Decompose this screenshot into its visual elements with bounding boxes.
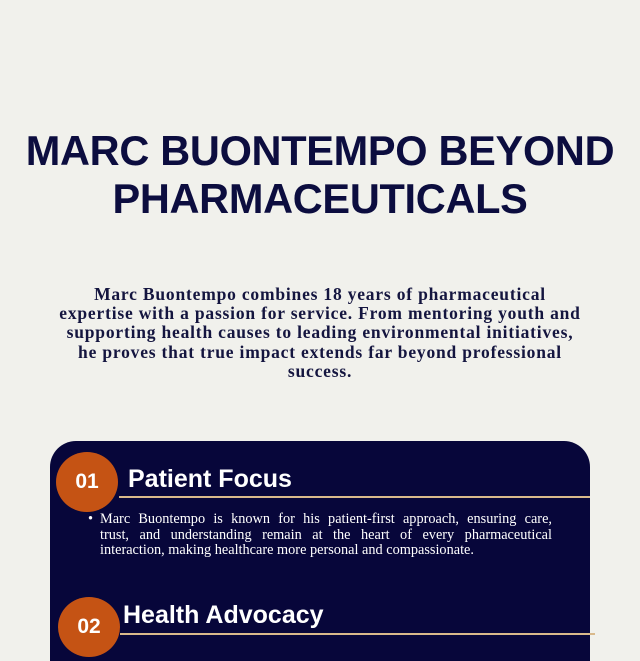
intro text [59, 284, 581, 381]
section 02 heading: Health Advocacy [123, 601, 324, 629]
section 01 text: interaction, making healthcare more personal and compassionate. [100, 542, 474, 558]
text: • [88, 511, 93, 527]
section 01 heading: Patient Focus [128, 465, 292, 493]
intro text: expertise with a passion for service. From mentoring youth and [59, 303, 581, 323]
section 01 text: trust, and understanding remain at the heart of every pharmaceutical [100, 527, 552, 543]
panel: sections [50, 441, 590, 661]
intro text: supporting health causes to leading environmental initiatives, [67, 322, 573, 342]
section 01 number badge: 01 [75, 470, 99, 493]
intro text: Marc Buontempo combines 18 years of pharmaceutical [94, 284, 546, 304]
title [26, 127, 614, 222]
intro text: success. [288, 361, 352, 381]
section 02 number badge [58, 597, 120, 657]
title: MARC BUONTEMPO BEYOND [26, 127, 614, 174]
section 01 text [88, 511, 552, 558]
section 02 number badge: 02 [77, 615, 101, 638]
intro text: he proves that true impact extends far beyond professional [78, 342, 562, 362]
title: PHARMACEUTICALS [112, 175, 528, 222]
section 01 text: Marc Buontempo is known for his patient-first approach, ensuring care, [100, 511, 552, 527]
section 01 number badge [56, 452, 118, 512]
